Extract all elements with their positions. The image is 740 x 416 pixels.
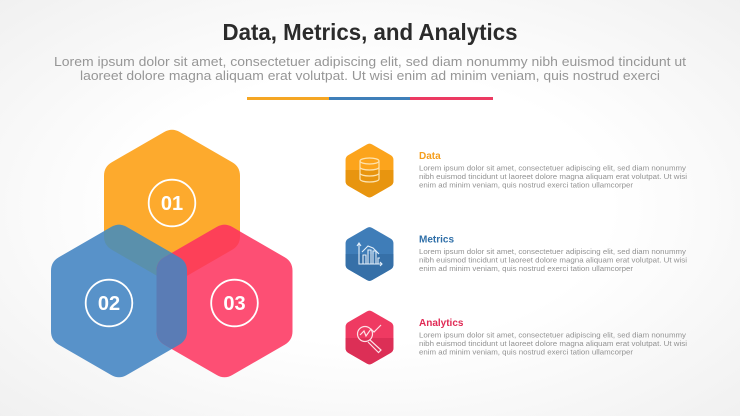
text block: Analytics: Lorem ipsum dolor sit amet, consectetuer adipiscing elit, sed diam nonummy <box>419 332 687 340</box>
badge 02 <box>86 280 132 326</box>
badge 01: 01 <box>161 193 183 215</box>
text block: Data: Data <box>419 151 441 162</box>
text block: Metrics: enim ad minim veniam, quis nostrud exerci tation ullamcorper <box>419 266 634 273</box>
subtitle: laoreet dolore magna aliquam erat volutpat. Ut wisi enim ad minim veniam, quis nostrud exerci <box>80 68 660 83</box>
hexagon 03 <box>156 225 292 377</box>
text block: Data: nibh euismod tincidunt ut laoreet dolore magna aliquam erat volutpat. Ut wisi <box>419 174 688 181</box>
hexagon 02 <box>51 225 187 377</box>
text block: Metrics: nibh euismod tincidunt ut laoreet dolore magna aliquam erat volutpat. Ut wisi <box>419 258 688 264</box>
text block: Metrics <box>419 234 688 273</box>
text block: Metrics: Lorem ipsum dolor sit amet, consectetuer adipiscing elit, sed diam nonummy <box>419 249 687 256</box>
overlap orange and red <box>156 224 240 276</box>
badge 03 <box>211 280 258 326</box>
tricolor divider <box>247 97 493 100</box>
venn hexagon diagram <box>51 130 292 377</box>
text block: Analytics <box>419 318 688 356</box>
icon: database <box>346 144 394 198</box>
title: Data, Metrics, and Analytics <box>222 19 518 45</box>
text block: Analytics: enim ad minim veniam, quis nostrud exerci tation ullamcorper <box>419 350 634 356</box>
overlap blue and red <box>156 253 187 349</box>
badge 01 <box>149 180 195 226</box>
hexagon 01 <box>104 130 240 282</box>
icon: bar chart <box>346 227 394 281</box>
subtitle <box>54 54 686 83</box>
badge 02: 02 <box>98 293 120 315</box>
text block: Analytics: nibh euismod tincidunt ut laoreet dolore magna aliquam erat volutpat. Ut wisi <box>419 341 688 348</box>
text block: Data: enim ad minim veniam, quis nostrud exerci tation ullamcorper <box>419 182 634 190</box>
text block: Analytics: Analytics <box>419 318 464 329</box>
text block: Data <box>419 151 688 190</box>
badge 03: 03 <box>223 293 246 315</box>
icon: magnifier analytics <box>346 310 394 364</box>
text block: Metrics: Metrics <box>419 234 454 246</box>
overlap orange and blue <box>104 224 172 276</box>
text block: Data: Lorem ipsum dolor sit amet, consectetuer adipiscing elit, sed diam nonummy <box>419 166 687 172</box>
subtitle: Lorem ipsum dolor sit amet, consectetuer adipiscing elit, sed diam nonummy nibh euismod tincidunt ut <box>54 54 686 69</box>
